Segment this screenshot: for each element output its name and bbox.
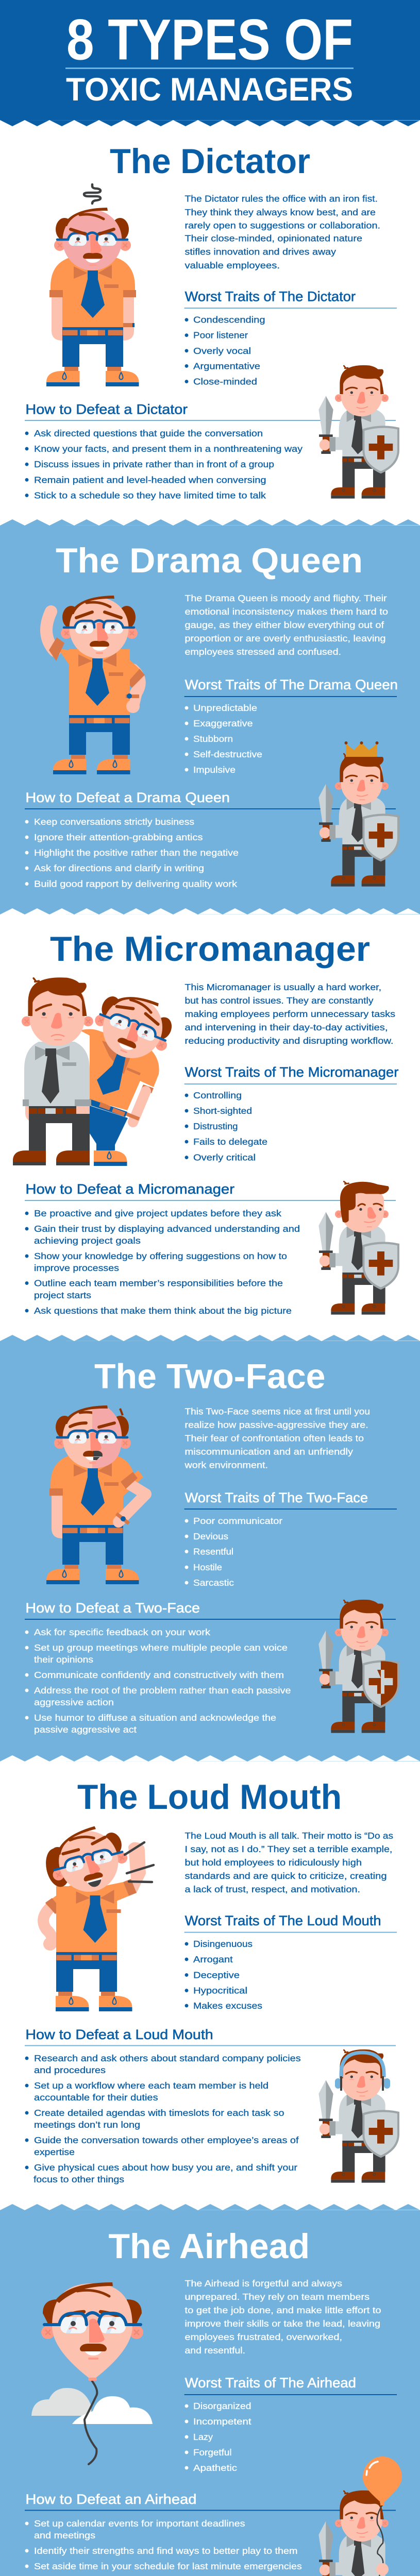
- heading: how to defeat: How to Defeat a Drama Queen: [25, 790, 230, 805]
- list: how to defeat: Ask for specific feedback on your work: [34, 1627, 210, 1637]
- list: worst traits: Stubborn: [193, 734, 233, 744]
- list: worst traits: [185, 1516, 282, 1588]
- character: micromanager looming over employee: [13, 977, 181, 1166]
- description text: [184, 593, 388, 657]
- list: how to defeat: Highlight the positive rather than the negative: [34, 848, 239, 858]
- list: how to defeat: Be proactive and give project updates before they ask: [34, 1208, 281, 1218]
- description text: a lack of trust, respect, and motivation.: [184, 1884, 360, 1894]
- list: worst traits: Close-minded: [193, 376, 257, 386]
- character: hero with crown: [318, 741, 399, 887]
- description text: and intervening in their day-to-day activities,: [184, 1022, 388, 1032]
- description text: The Dictator rules the office with an iron fist.: [184, 194, 378, 204]
- list: how to defeat: achieving project goals: [34, 1235, 141, 1246]
- list: worst traits: Disingenuous: [193, 1939, 253, 1949]
- description text: employees frustrated, overworked,: [184, 2332, 342, 2342]
- list: how to defeat: improve processes: [34, 1263, 119, 1273]
- list: how to defeat: and meetings: [34, 2530, 95, 2540]
- list: worst traits: [185, 2401, 251, 2473]
- list: how to defeat: Show your knowledge by offering suggestions on how to: [34, 1251, 287, 1261]
- list: how to defeat: [25, 817, 239, 889]
- description text: They think they always know best, and are: [184, 207, 376, 217]
- list: worst traits: Arrogant: [193, 1954, 233, 1964]
- description text: but has control issues. They are constantly: [184, 995, 374, 1006]
- character: two-face manager: [46, 1405, 146, 1584]
- description text: The Airhead is forgetful and always: [184, 2278, 342, 2289]
- description text: Their fear of confrontation often leads to: [184, 1433, 364, 1444]
- list: how to defeat: meetings don’t run long: [34, 2120, 140, 2130]
- description text: to get the job done, and make little effort to: [184, 2305, 381, 2315]
- list: worst traits: Disorganized: [193, 2401, 251, 2411]
- list: how to defeat: Research and ask others about standard company policies: [34, 2053, 301, 2063]
- description text: stifles innovation and drives away: [184, 247, 336, 257]
- panel: The Dictator: [25, 142, 399, 501]
- list: how to defeat: Give physical cues about how busy you are, and shift your: [34, 2162, 297, 2173]
- list: worst traits: Controlling: [193, 1090, 242, 1100]
- list: worst traits: Forgetful: [193, 2447, 232, 2458]
- list: worst traits: Unpredictable: [193, 703, 257, 713]
- panel: The Loud Mouth: [25, 1777, 399, 2184]
- list: how to defeat: Use humor to diffuse a situation and acknowledge the: [34, 1713, 276, 1723]
- section title: The Micromanager: [50, 929, 370, 969]
- list: how to defeat: Identify their strengths and find ways to better play to them: [34, 2546, 297, 2556]
- list: worst traits: Short-sighted: [193, 1106, 252, 1116]
- description text: [184, 2278, 381, 2355]
- list: worst traits: Poor communicator: [193, 1516, 282, 1526]
- list: how to defeat: Discuss issues in private rather than in front of a group: [34, 459, 274, 469]
- list: how to defeat: Set up group meetings where multiple people can voice: [34, 1642, 288, 1653]
- list: worst traits: [185, 1090, 267, 1163]
- list: how to defeat: [25, 2053, 301, 2184]
- heading: worst traits: Worst Traits of The Loud Mouth: [185, 1913, 381, 1928]
- description text: but hold employees to ridiculously high: [184, 1857, 362, 1868]
- list: how to defeat: Know your facts, and present them in a nonthreatening way: [34, 444, 303, 454]
- description text: [184, 1831, 393, 1894]
- heading: how to defeat: How to Defeat a Dictator: [25, 402, 188, 417]
- description text: employees stressed and confused.: [184, 647, 341, 657]
- heading: how to defeat: How to Defeat an Airhead: [25, 2492, 197, 2507]
- heading: worst traits: Worst Traits of The Two-Face: [185, 1490, 368, 1505]
- list: how to defeat: Ask directed questions that guide the conversation: [34, 428, 263, 438]
- section title: The Drama Queen: [56, 541, 363, 580]
- panel: The Drama Queen: [0, 519, 420, 914]
- list: worst traits: Resentful: [193, 1547, 233, 1557]
- list: worst traits: Overly critical: [193, 1153, 256, 1163]
- list: how to defeat: Set up calendar events for important deadlines: [34, 2518, 245, 2529]
- header banner: [0, 0, 420, 126]
- description text: standards and are quick to criticize, creating: [184, 1871, 387, 1881]
- list: worst traits: Overly vocal: [193, 346, 251, 356]
- list: how to defeat: expertise: [34, 2147, 75, 2157]
- description text: proportion or are overly enthusiastic, leaving: [184, 633, 385, 643]
- list: worst traits: Sarcastic: [193, 1578, 234, 1588]
- list: how to defeat: [25, 2518, 302, 2576]
- list: worst traits: [185, 703, 262, 775]
- list: how to defeat: accountable for their duties: [34, 2092, 158, 2103]
- list: how to defeat: focus to other things: [33, 2174, 124, 2184]
- description text: improve their skills or take the lead, leaving: [184, 2318, 380, 2329]
- description text: gauge, as they either blow everything out of: [184, 620, 384, 630]
- list: how to defeat: Stick to a schedule so they have limited time to talk: [34, 490, 266, 501]
- list: worst traits: Lazy: [193, 2432, 213, 2442]
- list: how to defeat: Address the root of the problem rather than each passive: [34, 1685, 291, 1696]
- list: how to defeat: Remain patient and level-headed when conversing: [34, 474, 266, 485]
- description text: reducing productivity and disrupting workflow.: [184, 1036, 394, 1046]
- description text: Their close-minded, opinionated nature: [184, 233, 362, 244]
- heading: how to defeat: How to Defeat a Loud Mouth: [25, 2027, 213, 2042]
- description text: rarely open to suggestions or collaboration.: [184, 221, 380, 231]
- character: drama queen manager: [46, 596, 145, 774]
- description text: This Two-Face seems nice at first until you: [184, 1406, 370, 1417]
- panel: The Two-Face: [0, 1335, 420, 1761]
- list: worst traits: Self-destructive: [193, 749, 262, 759]
- description text: I say, not as I do.” They set a terrible example,: [184, 1844, 392, 1854]
- list: how to defeat: Ask questions that make them think about the big picture: [34, 1306, 292, 1316]
- main title line two: TOXIC MANAGERS: [66, 72, 353, 108]
- list: worst traits: Incompetent: [193, 2416, 251, 2427]
- list: worst traits: [185, 315, 265, 386]
- panel: The Airhead: [0, 2204, 420, 2576]
- description text: unprepared. They rely on team members: [184, 2292, 369, 2302]
- list: worst traits: Makes excuses: [193, 2001, 262, 2011]
- heading: worst traits: Worst Traits of The Micromanager: [185, 1064, 398, 1080]
- description text: [184, 982, 395, 1046]
- list: how to defeat: [25, 1627, 291, 1735]
- description text: and resentful.: [184, 2345, 245, 2355]
- heading: how to defeat: How to Defeat a Two-Face: [25, 1600, 200, 1616]
- list: how to defeat: Guide the conversation towards other employee’s areas of: [34, 2135, 299, 2145]
- list: how to defeat: Create detailed agendas with timeslots for each task so: [34, 2108, 284, 2118]
- list: how to defeat: and procedures: [34, 2065, 106, 2075]
- list: how to defeat: aggressive action: [34, 1697, 114, 1707]
- list: how to defeat: Ignore their attention-grabbing antics: [34, 832, 203, 842]
- character: loud mouth manager shouting: [43, 1820, 154, 2011]
- panel: The Micromanager: [13, 929, 399, 1316]
- list: how to defeat: Ask for directions and clarify in writing: [34, 863, 204, 873]
- list: how to defeat: [25, 1208, 300, 1316]
- list: worst traits: Distrusting: [193, 1121, 238, 1131]
- list: worst traits: Apathetic: [193, 2463, 237, 2473]
- section title: The Dictator: [110, 142, 310, 181]
- list: how to defeat: Set aside time in your schedule for last minute emergencies: [34, 2561, 302, 2571]
- description text: The Loud Mouth is all talk. Their motto is “Do as: [184, 1831, 393, 1841]
- list: how to defeat: Outline each team member’s responsibilities before the: [34, 1278, 283, 1288]
- list: worst traits: Devious: [193, 1531, 228, 1541]
- list: worst traits: Fails to delegate: [193, 1137, 267, 1147]
- list: how to defeat: Set up a workflow where each team member is held: [34, 2080, 268, 2091]
- list: worst traits: Hostile: [193, 1562, 222, 1572]
- description text: work environment.: [184, 1460, 268, 1470]
- character: hero with swept hair: [318, 1181, 399, 1315]
- character: hero with headphones: [318, 2049, 399, 2183]
- list: worst traits: Condescending: [193, 315, 265, 325]
- heading: worst traits: Worst Traits of The Dictator: [185, 289, 356, 304]
- description text: [184, 194, 380, 270]
- list: how to defeat: their opinions: [34, 1654, 93, 1665]
- description text: emotional inconsistency makes them hard to: [184, 606, 388, 617]
- character: hero with sword and shield: [318, 365, 399, 499]
- description text: valuable employees.: [184, 260, 280, 270]
- heading: worst traits: Worst Traits of The Drama Queen: [185, 677, 398, 692]
- list: worst traits: [185, 1939, 262, 2011]
- heading: worst traits: Worst Traits of The Airhead: [185, 2375, 356, 2391]
- list: worst traits: Argumentative: [193, 361, 260, 371]
- description text: realize how passive-aggressive they are.: [184, 1420, 368, 1430]
- character: airhead balloon head with clouds: [31, 2282, 153, 2464]
- description text: This Micromanager is usually a hard worker,: [184, 982, 381, 992]
- list: how to defeat: Build good rapport by delivering quality work: [34, 879, 237, 889]
- section title: The Airhead: [108, 2227, 310, 2266]
- list: how to defeat: [25, 428, 303, 501]
- section title: The Loud Mouth: [77, 1777, 342, 1817]
- heading: how to defeat: How to Defeat a Micromanager: [25, 1181, 234, 1197]
- list: how to defeat: Gain their trust by displaying advanced understanding and: [34, 1224, 300, 1234]
- list: worst traits: Deceptive: [193, 1970, 240, 1980]
- list: worst traits: Exaggerative: [193, 718, 253, 728]
- list: how to defeat: project starts: [34, 1290, 91, 1300]
- character: hero holding orange balloon: [318, 2456, 402, 2576]
- list: worst traits: Poor listener: [193, 330, 248, 341]
- description text: [184, 1406, 370, 1470]
- character: angry dictator manager: [46, 184, 139, 386]
- list: how to defeat: Keep conversations strictly business: [34, 817, 194, 827]
- list: how to defeat: Communicate confidently and constructively with them: [34, 1670, 284, 1680]
- list: worst traits: Hypocritical: [193, 1986, 247, 1996]
- description text: The Drama Queen is moody and flighty. Their: [184, 593, 387, 603]
- main title line one: 8 TYPES OF: [66, 7, 353, 72]
- section title: The Two-Face: [94, 1357, 326, 1396]
- description text: miscommunication and an unfriendly: [184, 1447, 353, 1457]
- description text: making employees perform unnecessary tasks: [184, 1009, 395, 1019]
- list: worst traits: Impulsive: [193, 765, 236, 775]
- character: hero with split shield: [318, 1600, 399, 1733]
- list: how to defeat: passive aggressive act: [34, 1724, 137, 1735]
